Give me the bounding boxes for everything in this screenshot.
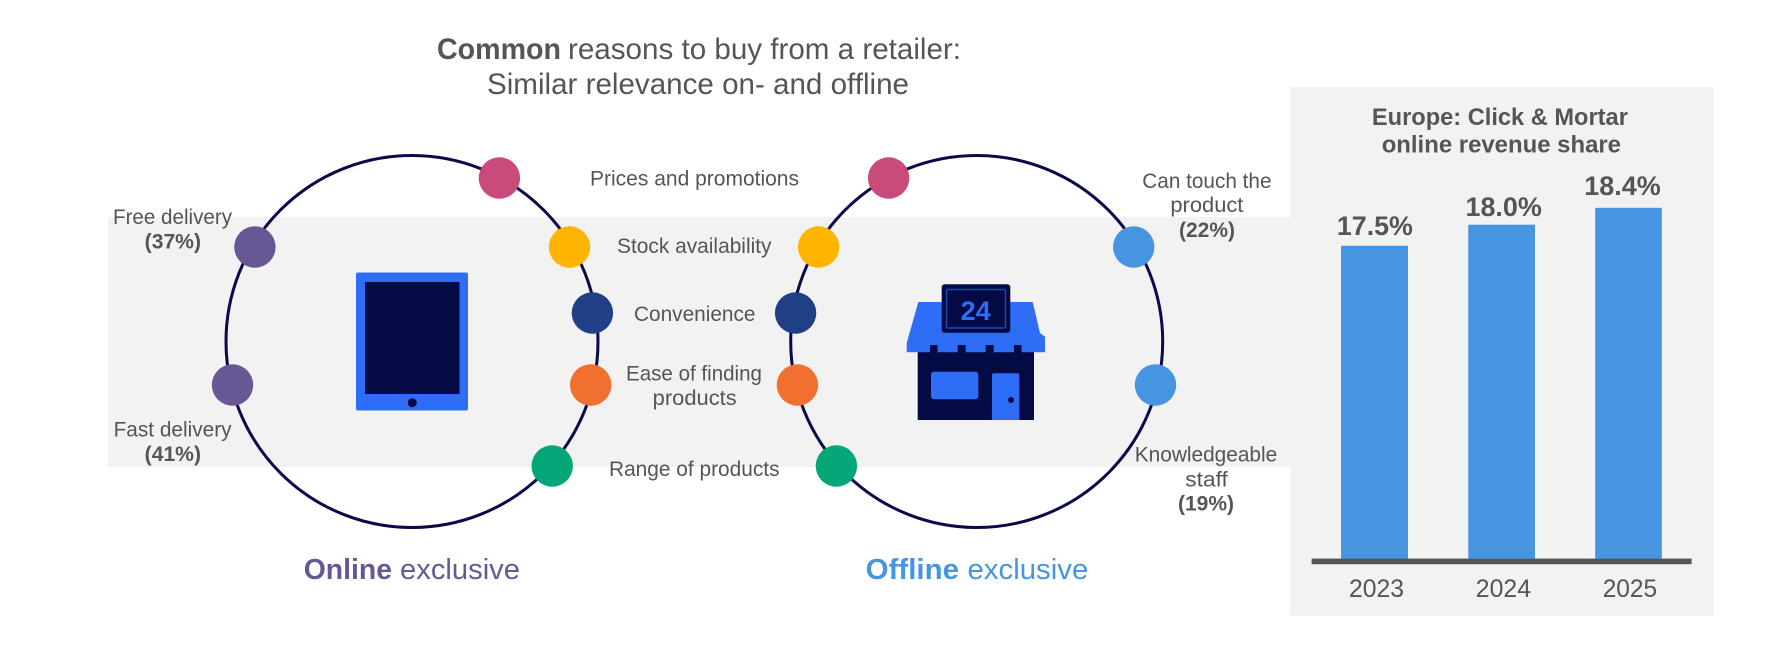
common reasons labels: Convenience <box>634 303 756 326</box>
label: fast delivery <box>114 418 232 466</box>
label: knowledgeable staff: (19%) <box>1178 492 1234 516</box>
bar chart: 17.5% <box>1337 211 1413 241</box>
label: free delivery: Free delivery <box>113 206 232 229</box>
heading: online exclusive: Online <box>304 554 392 586</box>
heading: online exclusive <box>304 554 520 586</box>
chart heading: online revenue share <box>1382 132 1621 159</box>
label: can touch the product <box>1142 170 1272 242</box>
common reasons labels: Range of products <box>609 458 780 481</box>
common reasons labels: Prices and promotions <box>590 168 799 190</box>
icon: store <box>907 284 1045 420</box>
bar chart: 18.4% <box>1584 171 1661 201</box>
label: knowledgeable staff <box>1135 444 1277 516</box>
title: Common <box>437 33 561 66</box>
label: fast delivery: Fast delivery <box>114 418 232 441</box>
panel: click and mortar chart <box>1290 87 1714 616</box>
panel background <box>1290 87 1714 616</box>
common reasons labels: products <box>653 387 737 410</box>
bar chart: 2024 <box>1476 575 1531 603</box>
chart heading <box>1372 104 1628 159</box>
icon: store: 24 <box>961 296 991 326</box>
bar chart: 2023 <box>1349 575 1404 603</box>
heading: offline exclusive: exclusive <box>968 554 1088 586</box>
heading: offline exclusive: Offline <box>866 554 959 586</box>
common reasons labels: Stock availability <box>617 235 772 258</box>
chart heading: Europe: Click & Mortar <box>1372 104 1628 131</box>
label: can touch the product: product <box>1170 194 1244 217</box>
common reasons labels <box>590 168 799 481</box>
label: can touch the product: Can touch the <box>1142 170 1272 193</box>
heading: offline exclusive <box>866 554 1088 586</box>
title <box>437 33 961 101</box>
label: knowledgeable staff: staff <box>1185 468 1228 492</box>
label: fast delivery: (41%) <box>145 443 201 466</box>
icon: tablet <box>356 272 468 410</box>
dots: online circle <box>212 157 613 487</box>
common reasons labels: Ease of finding <box>626 362 762 386</box>
title: Similar relevance on- and offline <box>487 68 909 101</box>
dots: offline circle <box>775 157 1176 487</box>
offline circle <box>791 156 1163 528</box>
online circle <box>226 156 598 528</box>
heading: online exclusive: exclusive <box>400 554 520 586</box>
bar chart: 2025 <box>1603 575 1657 603</box>
label: knowledgeable staff: Knowledgeable <box>1135 444 1277 467</box>
bar chart: 18.0% <box>1466 192 1542 222</box>
title: reasons to buy from a retailer: <box>568 33 961 66</box>
background band <box>108 217 1290 467</box>
label: free delivery <box>113 206 232 254</box>
bar chart <box>1312 171 1692 603</box>
label: free delivery: (37%) <box>145 231 201 254</box>
label: can touch the product: (22%) <box>1179 219 1235 242</box>
